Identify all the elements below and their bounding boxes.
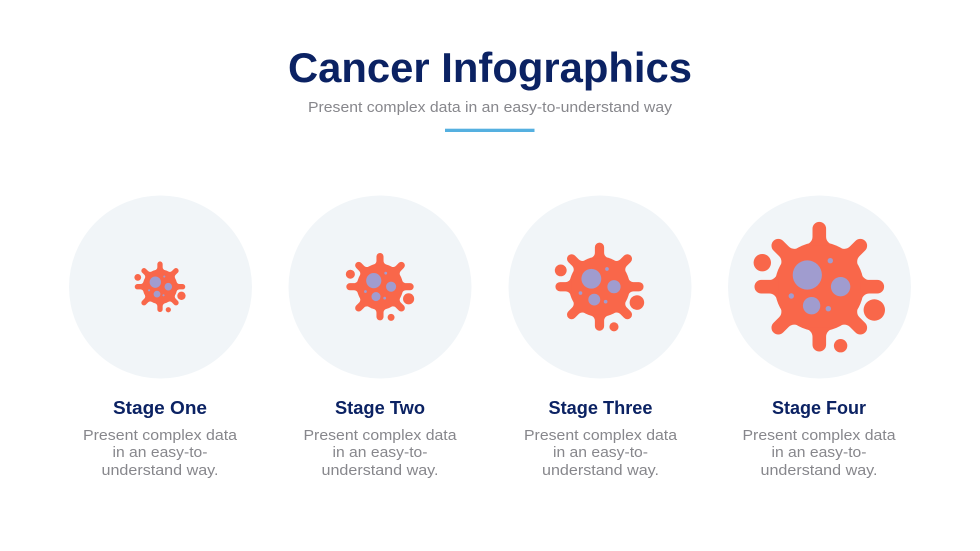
stage three heading: Stage Three — [548, 398, 652, 418]
stage four text: in an easy-to- — [772, 445, 867, 461]
stage one heading: Stage One — [113, 398, 207, 418]
stage four background circle — [728, 196, 911, 378]
stage four text: Present complex data — [742, 428, 896, 444]
panel: stage two — [288, 196, 472, 479]
stage three background circle — [508, 196, 692, 378]
stage one text — [83, 428, 237, 479]
stage four heading: Stage Four — [772, 398, 866, 418]
icon: stage four cancer cell — [754, 222, 885, 352]
stage three text: in an easy-to- — [553, 445, 648, 461]
stage three text: Present complex data — [524, 428, 677, 444]
icon: stage two cancer cell — [346, 253, 414, 321]
stage four text — [742, 428, 896, 479]
stage two heading: Stage Two — [335, 398, 425, 418]
panel: stage four — [728, 196, 911, 479]
stage four text: understand way. — [760, 463, 878, 479]
stage one text: Present complex data — [83, 428, 237, 444]
stage two background circle — [288, 196, 472, 378]
stage three text — [524, 428, 677, 479]
panel: stage one — [69, 196, 252, 479]
subtitle: Present complex data in an easy-to-understand way — [308, 99, 673, 116]
icon: stage three cancer cell — [555, 243, 644, 331]
panel: stage three — [508, 196, 692, 479]
stage one background circle — [69, 196, 252, 378]
stage two text: understand way. — [322, 463, 438, 479]
stage two text — [304, 428, 457, 479]
title: Cancer Infographics — [288, 44, 692, 91]
stage two text: Present complex data — [304, 428, 457, 444]
stage three text: understand way. — [542, 463, 659, 479]
title underline — [445, 129, 534, 132]
icon: stage one cancer cell — [134, 261, 186, 312]
stage one text: understand way. — [102, 463, 218, 479]
stage one text: in an easy-to- — [112, 445, 208, 461]
stage two text: in an easy-to- — [332, 445, 428, 461]
